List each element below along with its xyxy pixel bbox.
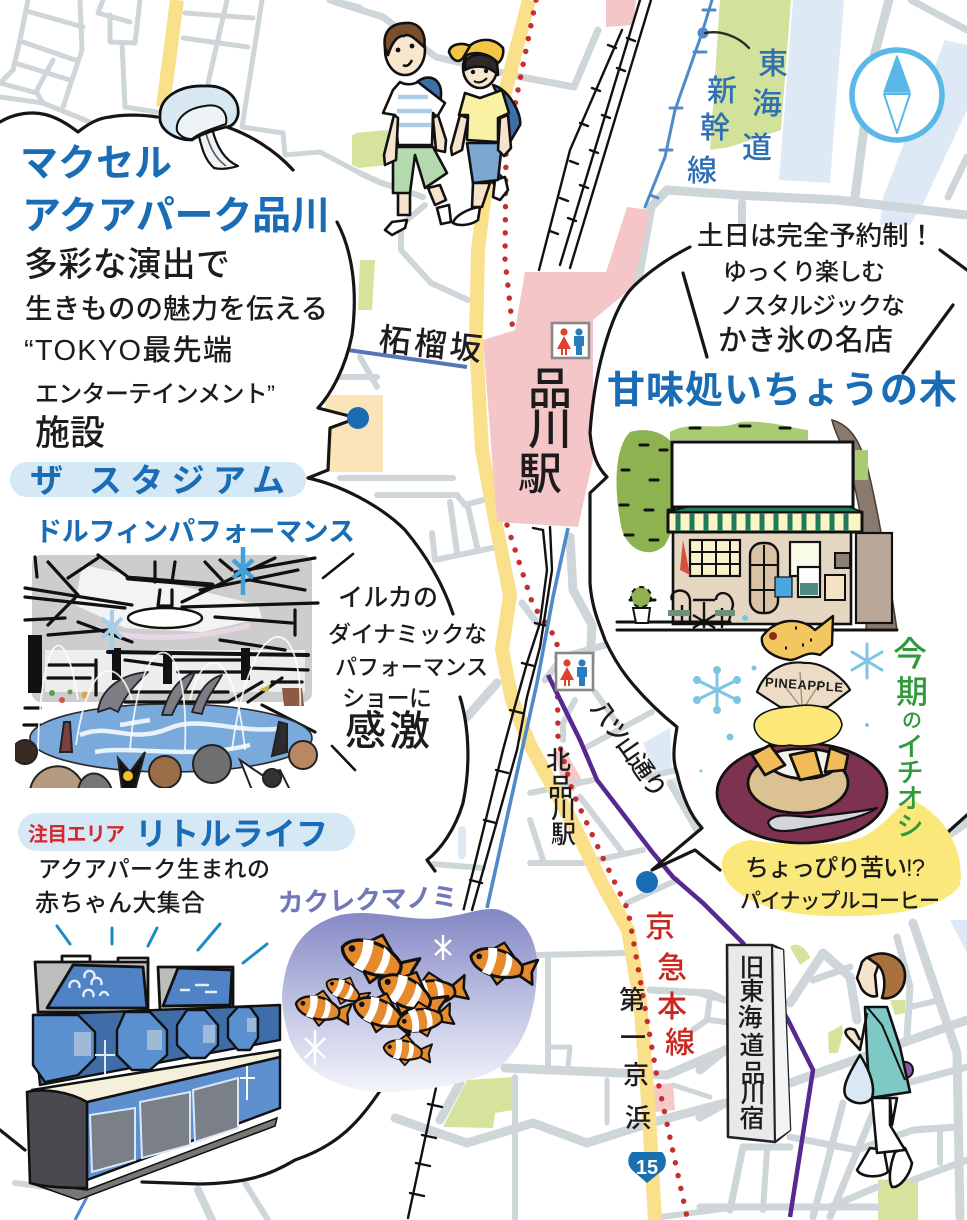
- subheading: Dolphin Performance: ドルフィンパフォーマンス: [35, 517, 355, 547]
- label: Route 1 Daiichi Keihin: 京: [623, 1060, 649, 1090]
- label: Sakakizaka: 柘榴坂: [377, 321, 483, 368]
- label: Tokaido Shinkansen: 幹: [700, 112, 730, 145]
- top row tanks: [35, 956, 233, 1012]
- icon: snowflake left: [694, 668, 740, 712]
- vertical text: this season's best: の: [902, 710, 922, 732]
- pill heading: Little Life: 注目エリア: [28, 823, 125, 846]
- heading: Kanmidokoro Ichou no Ki: 甘味処いちょうの木: [607, 370, 957, 412]
- callout line for Shinkansen: [705, 32, 749, 48]
- label: Route 1 Daiichi Keihin: [619, 985, 651, 1133]
- label: Tokaido Shinkansen: 線: [687, 155, 717, 188]
- illustration: pineapple fan: [757, 662, 850, 707]
- front tank: [87, 1057, 280, 1180]
- emphasis lines: [323, 554, 355, 770]
- text block: Aquapark description: [24, 246, 328, 453]
- signpost: Old Tokaido Shinagawa-juku: 旧: [739, 954, 765, 982]
- label: Kita-Shinagawa Station: 品: [548, 774, 573, 802]
- yellow road: 第一京浜: [476, 0, 655, 1220]
- railway tracks: north of station: [539, 0, 651, 270]
- vertical text: this season's best: 期: [896, 674, 928, 710]
- label: Keikyu Main Line: 線: [665, 1027, 695, 1060]
- signpost: Old Tokaido Shinagawa-juku: [727, 945, 790, 1142]
- text block: Little Life description: [35, 856, 270, 917]
- signpost: Old Tokaido Shinagawa-juku: 海: [737, 1004, 763, 1032]
- icon: route 15 shield: 15: [636, 1157, 658, 1179]
- label: Shinagawa Station: [518, 365, 572, 499]
- label: clownfish: カクレクマノミ: [277, 882, 458, 918]
- Keikyu line: red dotted rail: [505, 0, 687, 1217]
- text block: dolphin show comment: パフォーマンス: [335, 655, 488, 680]
- text block: Aquapark description: エンターテインメント”: [35, 381, 275, 408]
- pill heading: Little Life: [18, 813, 355, 852]
- Shinkansen line: blue track south: [487, 528, 568, 908]
- icon: compass: [852, 50, 942, 140]
- vertical text: this season's best: [893, 636, 928, 842]
- illustration: dolphin show: [13, 547, 318, 790]
- pill heading: Little Life: リトルライフ: [135, 816, 328, 852]
- illustration: shaved ice bowl: [717, 705, 887, 843]
- text block: Aquapark description: “TOKYO最先端: [24, 334, 232, 367]
- emphasis ticks above tanks: [57, 924, 267, 963]
- icon: route 15 shield: [628, 1152, 666, 1183]
- text block: Aquapark description: 多彩な演出で: [24, 246, 230, 284]
- Sakakizaka blue road: [348, 350, 467, 367]
- text block: Aquapark description: 生きものの魅力を伝える: [25, 293, 328, 324]
- label: Shinagawa Station: 川: [528, 405, 572, 454]
- middle row tanks: [33, 1005, 280, 1085]
- illustration: woman walking: [844, 953, 913, 1187]
- label: Tokaido Shinkansen: 道: [742, 132, 772, 165]
- label: Keikyu Main Line: 本: [657, 991, 687, 1024]
- text block: dolphin show comment: 感激: [345, 708, 430, 754]
- map dot: Aquapark location: [347, 407, 369, 429]
- illustration: shop front: [617, 420, 897, 630]
- label: Route 1 Daiichi Keihin: 浜: [625, 1103, 651, 1133]
- icon: toilets at Shinagawa Station: [552, 323, 589, 358]
- heading: Maxell Aqua Park Shinagawa: マクセル: [20, 143, 172, 185]
- label: Kita-Shinagawa Station: 駅: [551, 821, 576, 849]
- label: Keikyu Main Line: 京: [645, 911, 675, 944]
- text block: dolphin show comment: ショーに: [342, 685, 432, 711]
- railway tracks: south of station: [408, 527, 552, 1218]
- text block: dolphin show comment: ダイナミックな: [328, 621, 487, 647]
- Yatsuyama road purple line: [548, 675, 813, 1217]
- map dot: Ichou no Ki location: [636, 871, 658, 893]
- pill heading: The Stadium: ザ スタジアム: [30, 462, 285, 499]
- label: Shinagawa Station: 駅: [518, 450, 562, 499]
- icon: jellyfish: [160, 86, 238, 169]
- label: Route 1 Daiichi Keihin: 第: [619, 985, 645, 1015]
- label: Kita-Shinagawa Station: 川: [551, 796, 576, 824]
- heading: Maxell Aqua Park Shinagawa: アクアパーク品川: [22, 195, 330, 238]
- icon: snowflake right: [852, 644, 882, 678]
- heading: Maxell Aqua Park Shinagawa: [20, 143, 330, 238]
- label: Tokaido Shinkansen: 新: [707, 75, 737, 108]
- label: Tokaido Shinkansen: [687, 48, 788, 188]
- Shinkansen line: blue track north: [645, 0, 715, 207]
- text block: Little Life description: 赤ちゃん大集合: [35, 890, 205, 917]
- illustration: taiyaki: [762, 616, 833, 660]
- heading text: Ichou no Ki comment: 土日は完全予約制！: [697, 221, 935, 251]
- yellow callout: Pineapple Coffee: パイナップルコーヒー: [740, 890, 940, 913]
- boy: [383, 23, 451, 235]
- illustration: two children walking: [383, 23, 520, 235]
- text block: Little Life description: アクアパーク生まれの: [38, 856, 270, 882]
- label: Kita-Shinagawa Station: [546, 747, 576, 849]
- small Shinkansen segment bottom left: [75, 1195, 88, 1220]
- signpost: Old Tokaido Shinagawa-juku: 東: [739, 978, 765, 1006]
- vertical text: this season's best: 今: [893, 636, 927, 674]
- signpost: Old Tokaido Shinagawa-juku: 道: [739, 1032, 765, 1060]
- illustration: aquarium tanks: [27, 956, 280, 1200]
- vertical text: this season's best: オ: [896, 784, 924, 814]
- audience: [13, 722, 317, 790]
- text block: dolphin show comment: [328, 584, 488, 754]
- label: Kita-Shinagawa Station: 北: [546, 747, 571, 775]
- yellow road: upper left: [163, 0, 177, 107]
- dolphins: [98, 672, 222, 715]
- fish bubble: [282, 909, 541, 1092]
- heading text: Ichou no Ki comment: ゆっくり楽しむ: [723, 259, 885, 286]
- right balloon fill and outline: [590, 247, 967, 940]
- label: Route 1 Daiichi Keihin: 一: [620, 1023, 646, 1053]
- snow dots: [700, 615, 869, 772]
- heading text: Ichou no Ki comment: かき氷の名店: [718, 324, 893, 357]
- label: Yatsuyama-dori: 八ツ山通り: [585, 696, 671, 803]
- label: Keikyu Main Line: [645, 911, 695, 1060]
- label: Shinagawa Station: 品: [528, 365, 572, 414]
- label: Tokaido Shinkansen: 海: [752, 88, 782, 121]
- illustration: pineapple fan: PINEAPPLE: [765, 675, 844, 695]
- heading text: Ichou no Ki comment: ノスタルジックな: [720, 293, 905, 320]
- label: Keikyu Main Line: 急: [657, 952, 687, 985]
- child with cap: [449, 40, 520, 225]
- signpost: Old Tokaido Shinagawa-juku: 品: [740, 1060, 766, 1088]
- yellow callout: Pineapple Coffee: [722, 800, 961, 916]
- vertical text: this season's best: イ: [896, 732, 924, 762]
- vertical text: this season's best: シ: [896, 812, 924, 842]
- text block: Aquapark description: 施設: [35, 414, 105, 453]
- text block: dolphin show comment: イルカの: [338, 584, 438, 612]
- station building: Shinagawa pink block: [483, 0, 650, 527]
- left balloon fill and outline: [0, 113, 530, 1190]
- yellow callout: Pineapple Coffee: ちょっぴり苦い!?: [745, 855, 925, 882]
- heading text: Ichou no Ki comment: [697, 221, 935, 357]
- vertical text: this season's best: チ: [896, 758, 924, 788]
- icon: toilets at Kita-Shinagawa: [556, 653, 593, 690]
- label: Tokaido Shinkansen: 東: [758, 48, 788, 81]
- signpost: Old Tokaido Shinagawa-juku: 宿: [739, 1105, 765, 1133]
- signpost: Old Tokaido Shinagawa-juku: 川: [740, 1080, 766, 1108]
